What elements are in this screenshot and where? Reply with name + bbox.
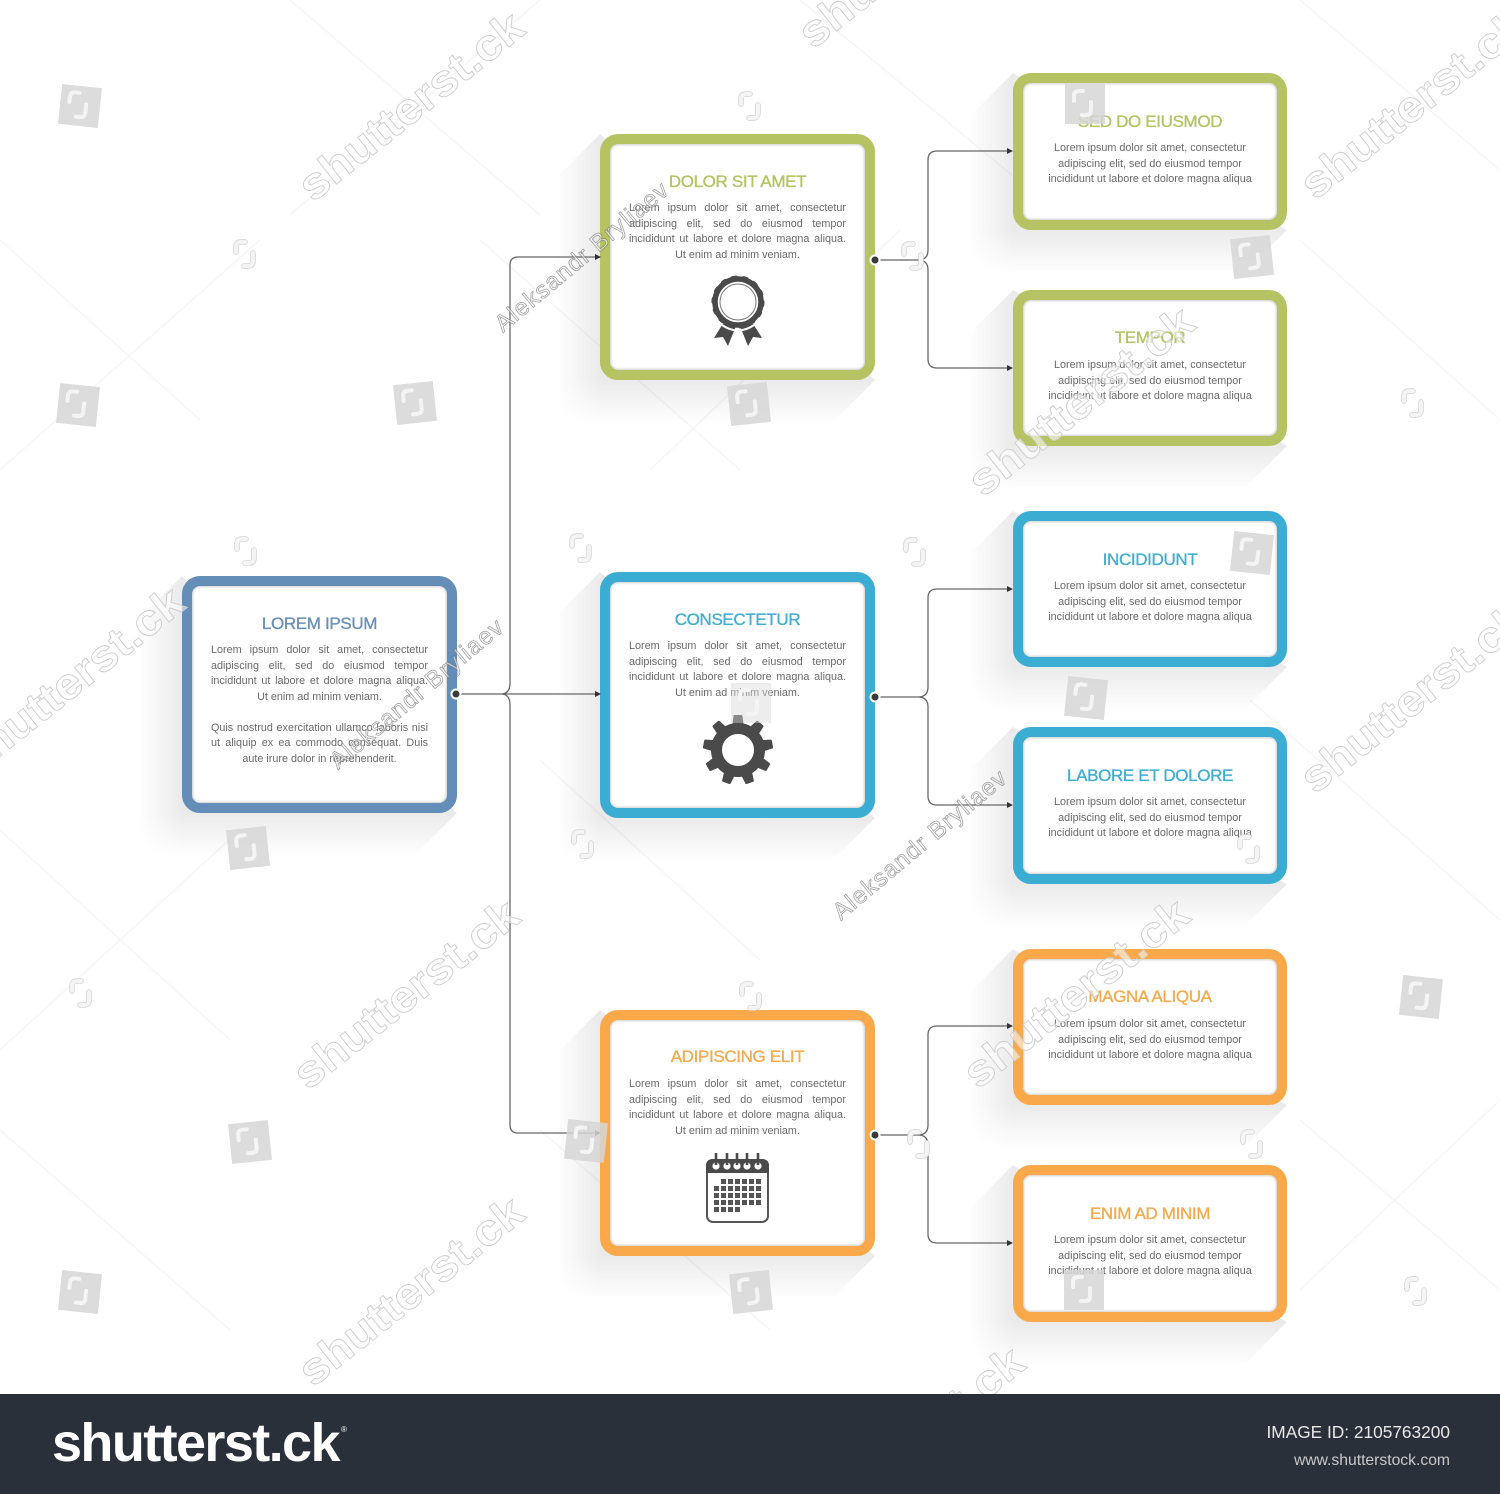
text block: lorem ipsum [211, 644, 428, 764]
text block: sed do eiusmod: adipiscing elit, sed do eiusmod tempor [1058, 158, 1242, 170]
panel: tempor [1013, 290, 1287, 446]
panel: incididunt [1013, 511, 1287, 667]
text block: adipiscing elit [629, 1078, 846, 1136]
text block: adipiscing elit: Ut enim ad minim veniam. [675, 1124, 800, 1136]
panel: dolor sit amet [600, 134, 875, 380]
watermark overlay: Aleksandr Bryliaev [490, 177, 674, 338]
text block: dolor sit amet [629, 202, 846, 260]
panel: consectetur [600, 572, 875, 818]
text block: dolor sit amet: incididunt ut labore et dolore magna aliqua. [629, 233, 846, 245]
heading: sed do eiusmod: SED DO EIUSMOD [1078, 112, 1222, 131]
text block: adipiscing elit: Lorem ipsum dolor sit amet, consectetur [629, 1078, 846, 1090]
text block: magna aliqua: Lorem ipsum dolor sit amet, consectetur [1054, 1018, 1246, 1030]
panel: adipiscing elit [600, 1010, 875, 1256]
panel: magna aliqua [1013, 949, 1287, 1105]
text block: magna aliqua: adipiscing elit, sed do eiusmod tempor [1058, 1034, 1242, 1046]
text block: tempor: Lorem ipsum dolor sit amet, consectetur [1054, 359, 1246, 371]
heading: labore et dolore: LABORE ET DOLORE [1067, 766, 1233, 785]
text block: adipiscing elit: adipiscing elit, sed do eiusmod tempor [629, 1094, 846, 1106]
watermark overlay: Aleksandr Bryliaev [325, 614, 509, 775]
text block: enim ad minim [1048, 1234, 1252, 1277]
text block: tempor [1048, 359, 1252, 402]
text block: enim ad minim: incididunt ut labore et dolore magna aliqua [1048, 1265, 1252, 1277]
panel: sed do eiusmod [1013, 73, 1287, 230]
panel: labore et dolore [1013, 727, 1287, 884]
panel: enim ad minim [1013, 1165, 1287, 1322]
text block: lorem ipsum: Ut enim ad minim veniam. [257, 690, 382, 702]
text block: labore et dolore: incididunt ut labore et dolore magna aliqua [1048, 827, 1252, 839]
text block: labore et dolore: adipiscing elit, sed do eiusmod tempor [1058, 812, 1242, 824]
text block: sed do eiusmod: incididunt ut labore et dolore magna aliqua [1048, 173, 1252, 185]
text block: tempor: incididunt ut labore et dolore magna aliqua [1048, 390, 1252, 402]
text block: consectetur [629, 640, 846, 698]
text block: adipiscing elit: incididunt ut labore et dolore magna aliqua. [629, 1109, 846, 1121]
watermark overlay: Aleksandr Bryliaev [828, 765, 1012, 926]
watermark overlay: shutterst.ck [954, 889, 1199, 1098]
text block: sed do eiusmod [1048, 142, 1252, 185]
text block: sed do eiusmod: Lorem ipsum dolor sit amet, consectetur [1054, 142, 1246, 154]
panel: lorem ipsum [182, 576, 457, 813]
text block: lorem ipsum: adipiscing elit, sed do eiusmod tempor [211, 660, 428, 672]
text block: consectetur: incididunt ut labore et dolore magna aliqua. [629, 671, 846, 683]
text block: enim ad minim: Lorem ipsum dolor sit amet, consectetur [1054, 1234, 1246, 1246]
text block: lorem ipsum: Quis nostrud exercitation ullamco laboris nisi [211, 722, 428, 734]
website: www.shutterstock.com [1294, 1452, 1450, 1469]
text block: consectetur: Lorem ipsum dolor sit amet, consectetur [629, 640, 846, 652]
heading: magna aliqua: MAGNA ALIQUA [1088, 987, 1212, 1006]
heading: tempor: TEMPOR [1115, 328, 1185, 347]
icon: calendar [706, 1153, 769, 1223]
text block: incididunt: Lorem ipsum dolor sit amet, consectetur [1054, 580, 1246, 592]
text block: incididunt: adipiscing elit, sed do eiusmod tempor [1058, 596, 1242, 608]
text block: incididunt [1048, 580, 1252, 623]
text block: magna aliqua [1048, 1018, 1252, 1061]
heading: enim ad minim: ENIM AD MINIM [1090, 1204, 1210, 1223]
heading: dolor sit amet: DOLOR SIT AMET [669, 172, 806, 191]
watermark overlay: shutterst.ck [289, 1187, 534, 1394]
text block: consectetur: adipiscing elit, sed do eiusmod tempor [629, 656, 846, 668]
text block: dolor sit amet: Ut enim ad minim veniam. [675, 248, 800, 260]
text block: labore et dolore: Lorem ipsum dolor sit amet, consectetur [1054, 796, 1246, 808]
watermark overlay: shutterst.ck [284, 890, 529, 1099]
heading: consectetur: CONSECTETUR [675, 610, 800, 629]
text block: labore et dolore [1048, 796, 1252, 839]
registered mark: ® [341, 1425, 347, 1434]
text block: lorem ipsum: aute irure dolor in reprehenderit. [242, 752, 397, 764]
heading: adipiscing elit: ADIPISCING ELIT [671, 1047, 804, 1066]
text block: dolor sit amet: Lorem ipsum dolor sit amet, consectetur [629, 202, 846, 214]
heading: lorem ipsum: LOREM IPSUM [262, 614, 377, 633]
text block: consectetur: Ut enim ad minim veniam. [675, 686, 800, 698]
image id: IMAGE ID: 2105763200 [1266, 1422, 1450, 1442]
watermark overlay: shutterst.ck [289, 2, 534, 211]
text block: lorem ipsum: ut aliquip ex ea commodo consequat. Duis [211, 737, 428, 749]
watermark overlay: shutterst.ck [959, 297, 1204, 506]
icon: gear [703, 715, 774, 784]
text block: incididunt: incididunt ut labore et dolore magna aliqua [1048, 611, 1252, 623]
logo wordmark: shutterst.ck [52, 1413, 339, 1473]
footer bar [0, 1394, 1500, 1494]
text block: dolor sit amet: adipiscing elit, sed do eiusmod tempor [629, 218, 846, 230]
text block: tempor: adipiscing elit, sed do eiusmod tempor [1058, 374, 1242, 386]
icon: award ribbon [712, 276, 764, 346]
text block: lorem ipsum: incididunt ut labore et dolore magna aliqua. [211, 675, 428, 687]
heading: incididunt: INCIDIDUNT [1103, 550, 1197, 569]
text block: magna aliqua: incididunt ut labore et dolore magna aliqua [1048, 1049, 1252, 1061]
text block: enim ad minim: adipiscing elit, sed do eiusmod tempor [1058, 1250, 1242, 1262]
text block: lorem ipsum: Lorem ipsum dolor sit amet, consectetur [211, 644, 428, 656]
